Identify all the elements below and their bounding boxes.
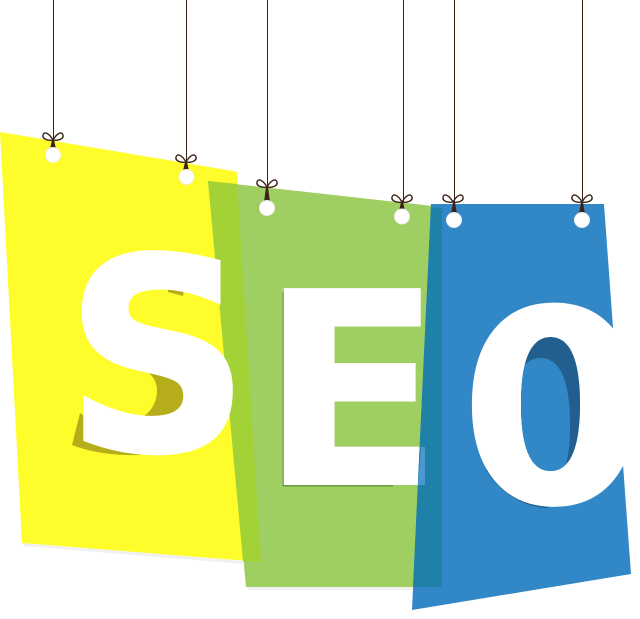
letter S shadow	[72, 286, 190, 455]
letter O shadow	[486, 460, 548, 508]
string 1	[43, 0, 63, 162]
panel: green tag	[208, 181, 442, 590]
overlap: green and blue	[413, 207, 442, 587]
letter S: S	[65, 202, 250, 513]
panel: yellow tag	[0, 132, 261, 564]
string 4	[392, 0, 412, 224]
string 5	[443, 0, 463, 228]
panel: blue tag	[412, 204, 631, 610]
letter E shadow	[282, 292, 393, 486]
string 6	[572, 0, 592, 228]
hanging strings, bows and eyelets	[43, 0, 592, 228]
string 2	[176, 0, 196, 184]
overlap: E arm under blue	[418, 447, 425, 485]
letter O counter	[514, 337, 594, 471]
overlap: yellow and green	[208, 181, 261, 562]
string 3	[257, 0, 277, 216]
letter E: E	[259, 234, 443, 549]
